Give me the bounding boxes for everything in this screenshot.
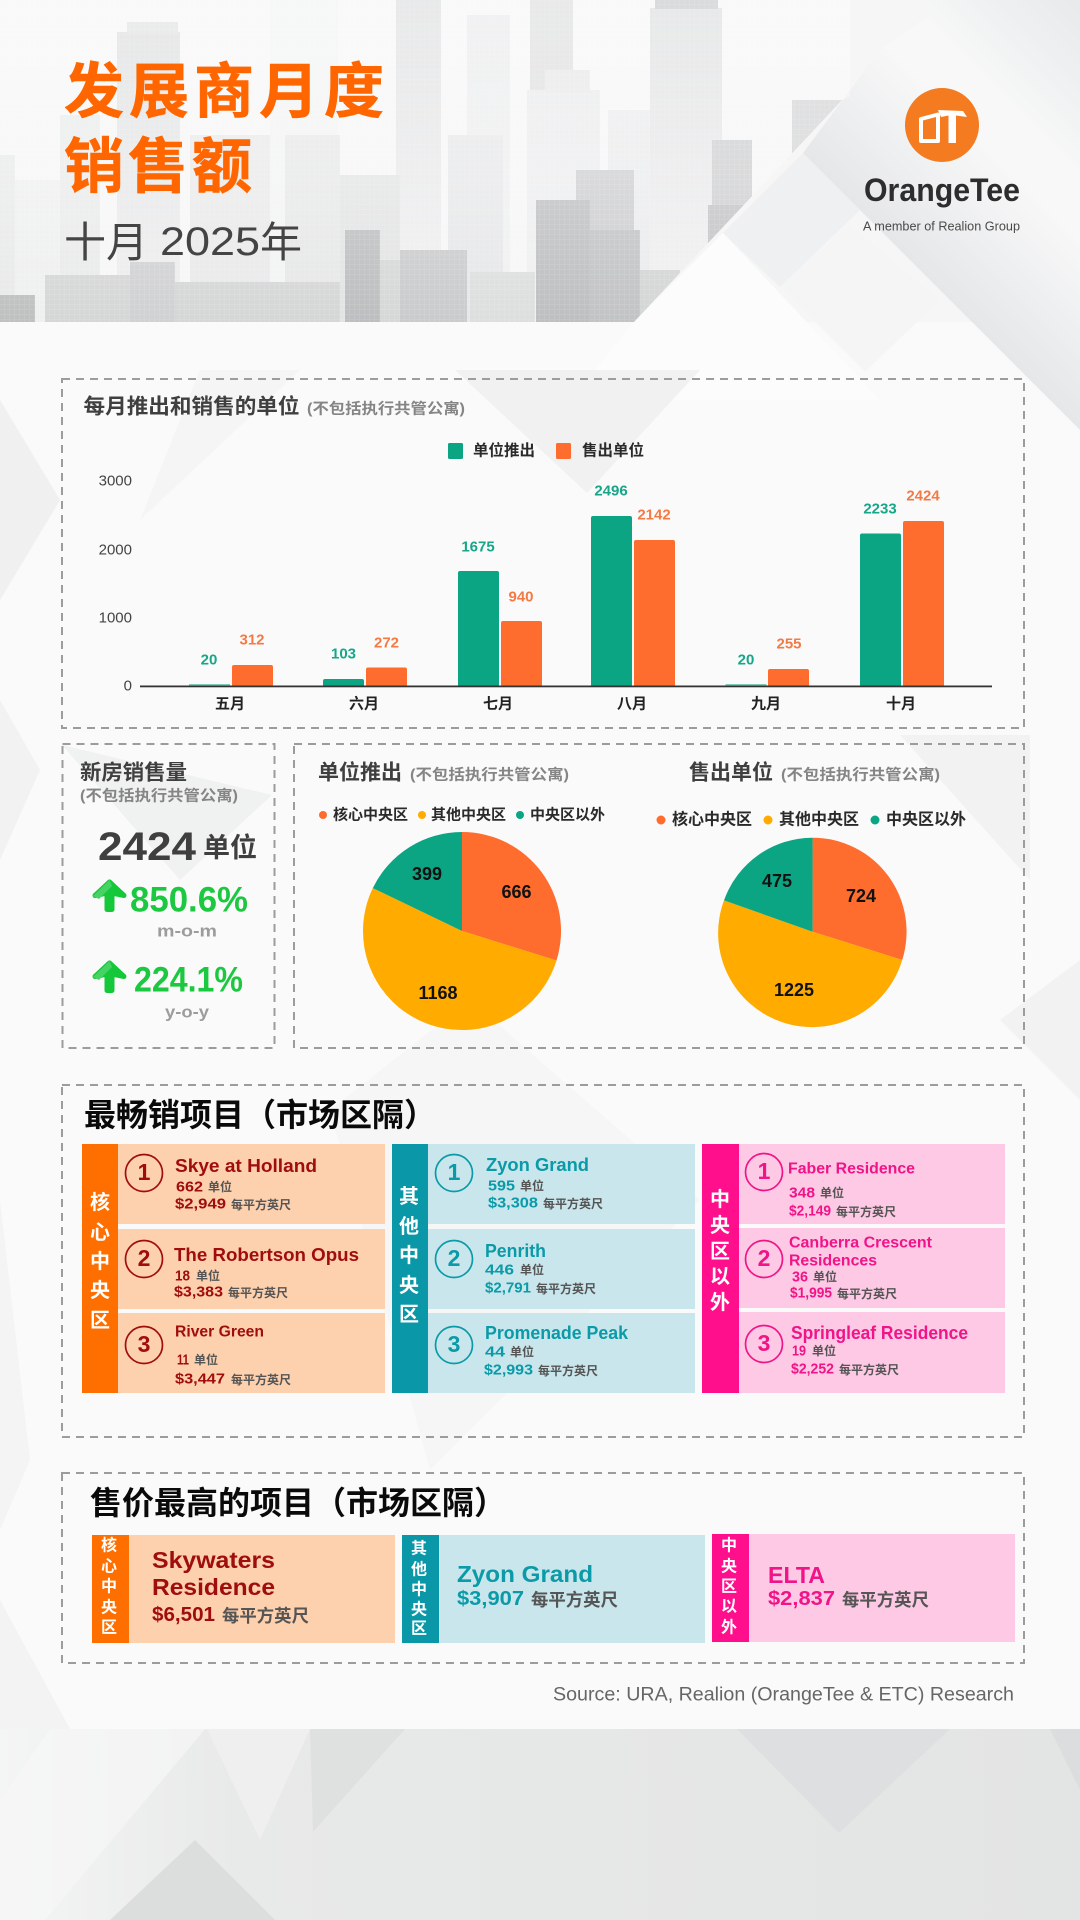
column: outside central region: 1 [758,1158,771,1184]
column: core central region: The Robertson Opus [174,1245,359,1265]
card: core central region: Residence [152,1574,275,1600]
icon: up arrow month on month [93,880,124,910]
year on year change: y-o-y [165,1002,210,1022]
column: rest of central region: 中 [399,1244,419,1267]
column: outside central region: 单位 [812,1343,836,1358]
column: core central region: 央 [90,1279,110,1302]
heading: units sold: (不包括执行共管公寓) [781,766,940,784]
column: rest of central region [392,1144,695,1393]
bar chart: 312 [239,632,265,648]
heading [80,760,238,804]
total units sold: 2424 [98,825,197,869]
year on year change [134,960,243,1022]
column: core central region: 18 [175,1268,190,1284]
total units sold: 单位 [203,832,257,863]
column: core central region: 2 [138,1245,150,1271]
panel: new home sales [62,744,274,1048]
column: outside central region: 单位 [820,1185,844,1200]
column: outside central region: Springleaf Residence [791,1323,968,1343]
pie chart: units launched: 399 [412,864,442,884]
bar chart: 20 [201,652,217,668]
legend: sold pie [656,810,966,828]
column: outside central region: 外 [710,1291,730,1314]
bar chart: 2233 [863,500,897,518]
bar chart: 九月 [751,696,781,712]
column: outside central region: 以 [710,1266,730,1288]
column: outside central region: 348 [789,1184,815,1202]
card: outside central region: $2,837 [768,1588,835,1610]
card: rest of central region: 区 [411,1620,427,1638]
bar chart: 103 [331,646,356,662]
source note: Source: URA, Realion (OrangeTee & ETC) Research [553,1684,1014,1706]
column: core central region: $3,447 [175,1370,225,1388]
column: outside central region: Faber Residence [788,1160,915,1178]
subtitle date: 十月 [64,218,148,266]
column: rest of central region: 单位 [520,1262,544,1277]
card: rest of central region [402,1535,705,1643]
pie chart: units launched: 666 [501,882,532,902]
panel: highest priced projects by market segment [62,1473,1024,1663]
bar chart: 0 [124,678,132,694]
card: outside central region [712,1534,1015,1642]
chart heading [84,394,465,418]
logo: OrangeTee: OrangeTee [864,172,1020,208]
total units sold [98,825,257,869]
title: 发展商月度 [64,58,389,126]
legend: launched pie [319,806,605,824]
title: 销售额 [64,134,256,200]
bar chart: 3000 [99,472,132,490]
heading: 最畅销项目（市场区隔） [84,1097,436,1133]
bar chart: 255 [776,636,802,652]
pie chart: units launched: 1168 [418,983,458,1003]
bar chart: 2424 [906,488,940,504]
card: core central region: 中 [101,1578,117,1596]
pie chart: units launched [363,832,561,1030]
pie chart: units sold [718,838,907,1027]
column: rest of central region: 44 [485,1344,506,1360]
column: core central region: $2,949 [175,1196,226,1212]
panel: best selling projects by market segment [62,1085,1024,1437]
card: rest of central region: Zyon Grand [457,1561,593,1587]
card: outside central region: 外 [721,1618,737,1636]
bar chart: 20 [738,652,754,668]
card: core central region: 区 [101,1620,117,1636]
column: outside central region: 36 [792,1268,808,1286]
card: outside central region: ELTA [768,1562,825,1588]
column: rest of central region: 其 [399,1185,419,1208]
month on month change: 850.6% [130,880,248,920]
card: rest of central region: 中 [411,1580,427,1598]
column: rest of central region: 央 [399,1274,419,1297]
pie chart: units sold: 724 [846,886,876,906]
heading: units launched [318,760,569,784]
subtitle date: 2025 [160,220,260,264]
logo: OrangeTee: A member of Realion Group [863,218,1020,234]
column: outside central region: 2 [758,1245,770,1271]
card: rest of central region: 央 [411,1600,427,1618]
column: core central region: 区 [90,1310,110,1332]
logo: OrangeTee [863,88,1020,234]
card: core central region: 央 [101,1598,117,1616]
bar chart: 五月 [215,696,245,712]
pie chart: units sold: 1225 [774,980,814,1000]
chart heading: 每月推出和销售的单位 [84,394,300,418]
pie chart: units sold: 475 [762,871,792,891]
column: outside central region: 央 [710,1214,730,1237]
bar chart: 940 [508,588,534,606]
column: core central region: 每平方英尺 [231,1372,291,1387]
column: rest of central region: 3 [448,1331,460,1357]
column: outside central region: 区 [710,1241,730,1263]
column: rest of central region: 1 [448,1159,461,1185]
column: rest of central region: 每平方英尺 [543,1196,603,1211]
column: outside central region: $2,252 [791,1360,834,1378]
column: outside central region: $1,995 [790,1284,832,1302]
chart legend: 售出单位 [582,440,644,460]
column: core central region: River Green [175,1324,264,1340]
column: rest of central region: 446 [485,1262,514,1278]
heading: units launched: (不包括执行共管公寓) [410,766,569,784]
legend: launched pie: 中央区以外 [530,806,605,824]
bar chart: 272 [374,634,399,652]
column: rest of central region: $2,993 [484,1362,533,1378]
chart legend: 单位推出 [473,440,535,460]
column: core central region: 单位 [196,1268,220,1283]
column: core central region: 心 [90,1221,110,1244]
card: rest of central region: 其 [411,1540,427,1558]
column: rest of central region: 他 [399,1215,419,1238]
column: core central region [82,1144,385,1393]
column: rest of central region: 单位 [510,1344,534,1359]
heading: units sold: 售出单位 [689,760,773,784]
legend: launched pie: 其他中央区 [431,806,506,824]
column: rest of central region: 单位 [520,1178,544,1193]
column: outside central region: 每平方英尺 [837,1286,897,1301]
bar chart: 1675 [461,538,495,556]
panel: launches and sales by market segment [294,744,1024,1048]
card: outside central region: 中 [721,1536,737,1554]
chart legend [448,440,644,460]
column: rest of central region: 2 [448,1245,460,1271]
heading: (不包括执行共管公寓) [80,786,238,804]
column: core central region: $3,383 [174,1284,223,1300]
column: outside central region [702,1144,1005,1393]
icon: up arrow year on year [93,961,124,990]
column: outside central region: 每平方英尺 [839,1362,899,1377]
column: rest of central region: 595 [488,1178,515,1194]
column: core central region: 核 [90,1190,110,1214]
card: core central region: $6,501 [152,1604,215,1626]
column: outside central region: 单位 [813,1269,837,1284]
bar chart: 八月 [617,696,647,712]
column: core central region: 单位 [208,1179,232,1194]
card: core central region: Skywaters [152,1547,275,1573]
column: core central region: 3 [138,1331,150,1357]
heading: 售价最高的项目（市场区隔） [90,1485,506,1521]
legend: sold pie: 中央区以外 [886,810,966,828]
card: rest of central region: 他 [411,1560,427,1578]
card: rest of central region: 每平方英尺 [531,1590,618,1610]
card: outside central region: 区 [721,1578,737,1596]
bar chart: 2142 [637,506,671,524]
heading: 新房销售量 [80,760,187,784]
skyline image band [0,0,850,322]
card: core central region [92,1535,395,1643]
column: rest of central region: 区 [399,1304,419,1326]
title [64,58,389,200]
column: rest of central region: Penrith [485,1241,546,1261]
column: core central region: 单位 [194,1352,218,1367]
bar chart: 七月 [483,696,513,712]
column: core central region: Skye at Holland [175,1156,317,1176]
column: rest of central region: $3,308 [488,1194,538,1212]
column: rest of central region: Zyon Grand [486,1155,589,1175]
month on month change [130,880,248,940]
column: outside central region: 3 [758,1330,770,1356]
card: core central region: 每平方英尺 [222,1606,309,1626]
month on month change: m-o-m [157,922,217,940]
column: rest of central region: 每平方英尺 [536,1281,596,1296]
column: core central region: 662 [176,1178,203,1196]
column: rest of central region: Promenade Peak [485,1323,629,1343]
panel: monthly launches and sales [62,379,1024,728]
column: outside central region: $2,149 [789,1202,831,1220]
card: core central region: 核 [101,1536,117,1554]
bar chart: 十月 [886,696,916,712]
card: outside central region: 以 [721,1598,737,1616]
chart heading: (不包括执行共管公寓) [307,400,465,418]
legend: sold pie: 核心中央区 [672,810,752,828]
column: rest of central region: 每平方英尺 [538,1363,598,1378]
column: outside central region: 每平方英尺 [836,1204,896,1219]
column: core central region: 1 [138,1159,151,1185]
heading: units sold [689,760,940,784]
bar chart [99,472,992,712]
subtitle date: 年 [260,218,302,266]
heading: units launched: 单位推出 [318,760,402,784]
column: outside central region: 19 [792,1342,806,1360]
column: core central region: 每平方英尺 [231,1197,291,1212]
card: core central region: 心 [101,1558,117,1576]
bar chart: 2496 [594,482,628,500]
bar chart: 2000 [99,542,132,558]
card: outside central region: 央 [721,1558,737,1576]
legend: sold pie: 其他中央区 [779,810,859,828]
column: core central region: 中 [90,1250,110,1273]
year on year change: 224.1% [134,960,243,1000]
column: core central region: 每平方英尺 [228,1285,288,1300]
column: outside central region: 中 [710,1188,730,1211]
column: rest of central region: $2,791 [485,1280,531,1296]
bar chart: 1000 [99,610,132,626]
column: outside central region: Canberra Crescent [789,1234,933,1252]
column: outside central region: Residences [789,1252,877,1270]
column: core central region: 11 [177,1352,189,1368]
bar chart: 六月 [349,696,379,712]
legend: launched pie: 核心中央区 [333,806,408,824]
card: rest of central region: $3,907 [457,1588,524,1610]
card: outside central region: 每平方英尺 [842,1590,929,1610]
